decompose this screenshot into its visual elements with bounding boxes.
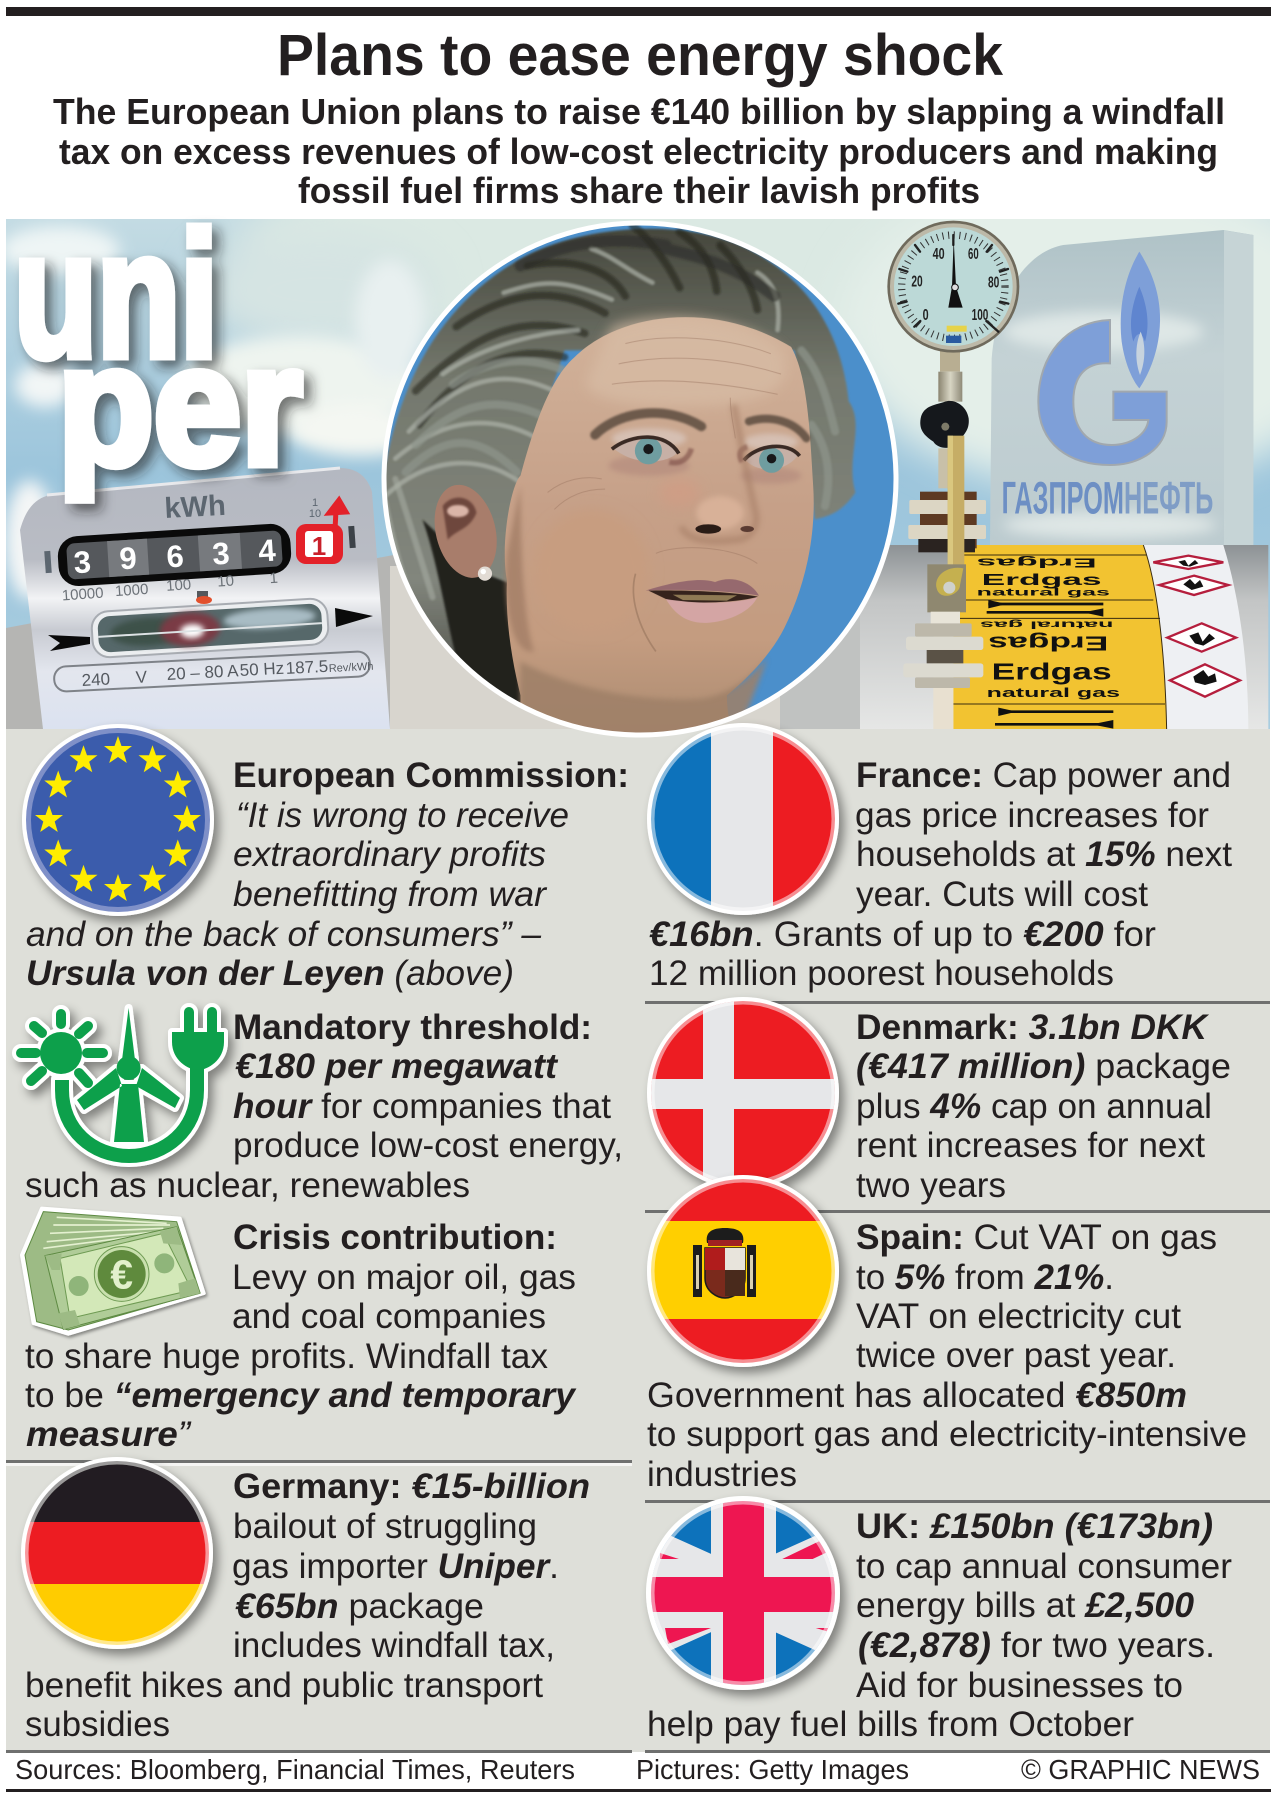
top rule	[6, 7, 1271, 16]
text: Denmark: Denmark: 3.1bn DKK	[856, 1008, 1210, 1047]
text: Crisis contribution: to be “emergency and temporary	[25, 1376, 577, 1415]
photo: electricity meter	[20, 468, 390, 729]
ear	[434, 484, 497, 581]
photo: Gazprom sign, gauge and gas pipe	[860, 221, 1268, 730]
photo: Uniper logo	[14, 195, 302, 501]
horizontal rules	[6, 1001, 1271, 1792]
text: Denmark: two years	[856, 1166, 1006, 1205]
content panel background	[6, 729, 1270, 1752]
photo: electricity meter: 100	[166, 576, 192, 595]
text: France: 12 million poorest households	[649, 954, 1114, 993]
gas pipe with labels: Erdgas	[977, 555, 1097, 570]
text: Mandatory threshold: €180 per megawatt	[235, 1047, 558, 1086]
text: Mandatory threshold: Mandatory threshold:	[233, 1008, 592, 1047]
text: France: year. Cuts will cost	[856, 875, 1148, 914]
icon: Spanish flag	[645, 1175, 845, 1369]
text: Germany: benefit hikes and public transport	[25, 1666, 543, 1705]
text: Spain	[647, 1218, 1247, 1494]
subtitle	[53, 91, 1225, 211]
text: Germany	[25, 1467, 590, 1744]
icon: EU flag	[22, 724, 214, 916]
text: France: €16bn. Grants of up to €200 for	[649, 915, 1156, 954]
text: Spain: to 5% from 21%.	[856, 1258, 1114, 1297]
text: Denmark: (€417 million) package	[856, 1047, 1231, 1086]
gas pipe with labels: natural gas	[979, 618, 1113, 629]
photo: electricity meter: 4	[257, 533, 277, 569]
photo montage background	[6, 219, 1270, 729]
text: Crisis contribution: and coal companies	[232, 1297, 546, 1336]
text: Denmark: plus 4% cap on annual	[856, 1087, 1212, 1126]
photo: electricity meter: kWh	[164, 490, 227, 525]
text: Crisis contribution: Crisis contribution:	[233, 1218, 557, 1257]
text: UK: energy bills at £2,500	[856, 1586, 1195, 1625]
eyes and brows	[595, 413, 806, 484]
footer credits: Pictures: Getty Images	[636, 1754, 909, 1785]
photo: electricity meter: 9	[118, 540, 138, 576]
text: European Commission: “It is wrong to receive	[236, 796, 569, 835]
photo: electricity meter: 3	[211, 536, 231, 572]
icon: euro banknotes: €	[110, 1251, 133, 1297]
text: Mandatory threshold	[25, 1008, 623, 1205]
gas pipe with labels	[860, 545, 1268, 730]
text: Crisis contribution: measure”	[26, 1415, 191, 1454]
photo: electricity meter: 10000	[61, 585, 104, 604]
photo: electricity meter: 3	[73, 544, 92, 580]
pressure gauge and valve: 40	[933, 246, 945, 263]
photo: electricity meter: 50 Hz	[239, 659, 285, 680]
icon: euro banknotes	[22, 1208, 204, 1334]
gas pipe with labels: Erdgas	[992, 658, 1112, 684]
photo: Uniper logo: uni	[14, 195, 218, 394]
photo: electricity meter: 1	[312, 497, 318, 509]
text: Germany: €65bn package	[235, 1587, 484, 1626]
text: European Commission: European Commission:	[233, 756, 629, 795]
footer credits: © GRAPHIC NEWS	[1021, 1754, 1260, 1785]
text: Spain: Government has allocated €850m	[647, 1376, 1187, 1415]
pressure gauge and valve: 0	[923, 307, 929, 324]
photo: Ursula von der Leyen portrait	[375, 215, 906, 746]
text: France	[649, 756, 1232, 993]
text: Crisis contribution: to share huge profits. Windfall tax	[25, 1337, 548, 1376]
text: Germany: includes windfall tax,	[233, 1626, 555, 1665]
text: Mandatory threshold: such as nuclear, renewables	[25, 1166, 470, 1205]
text: Spain: Spain: Cut VAT on gas	[856, 1218, 1217, 1257]
text: France: France: Cap power and	[856, 756, 1231, 795]
photo: electricity meter: 240	[81, 670, 111, 690]
mouth	[633, 574, 759, 651]
text: Crisis contribution	[25, 1218, 577, 1454]
text: Mandatory threshold: hour for companies that	[233, 1087, 611, 1126]
text: Spain: twice over past year.	[856, 1336, 1176, 1375]
photo: electricity meter: 1000	[114, 581, 149, 600]
text: UK: help pay fuel bills from October	[647, 1705, 1134, 1744]
icon: German flag	[20, 1455, 220, 1654]
footer credits: Sources: Bloomberg, Financial Times, Reuters	[15, 1754, 575, 1785]
text: Germany: gas importer Uniper.	[232, 1547, 559, 1586]
photo: electricity meter: 10	[217, 572, 235, 591]
icon: Danish flag	[645, 995, 845, 1195]
text: European Commission: benefitting from war	[233, 875, 547, 914]
pressure gauge and valve: 100	[972, 307, 988, 324]
title: Plans to ease energy shock	[277, 23, 1004, 88]
photo: electricity meter: 10	[309, 508, 321, 520]
gas pipe with labels: Erdgas	[988, 632, 1108, 654]
icon: UK flag	[644, 1496, 852, 1702]
photo: electricity meter: Rev/kWh	[329, 661, 374, 675]
pressure gauge and valve: 20	[911, 274, 923, 291]
gas pipe with labels: natural gas	[977, 588, 1111, 599]
photo: electricity meter: 187.5	[285, 657, 329, 678]
text: Germany: subsidies	[25, 1705, 170, 1744]
text: Spain: to support gas and electricity-intensive	[647, 1415, 1247, 1454]
Gazprom sign: ГАЗПРОМНЕФТЬ	[1002, 472, 1213, 523]
icon: French flag	[645, 720, 843, 920]
photo: electricity meter: 20 – 80 A	[166, 661, 240, 684]
gas pipe with labels: natural gas	[987, 685, 1120, 700]
pressure gauge and valve: 80	[988, 274, 999, 291]
face	[425, 317, 814, 746]
text: France: gas price increases for	[855, 796, 1209, 835]
text: Crisis contribution: Levy on major oil, gas	[232, 1258, 576, 1297]
text: European Commission: extraordinary profits	[233, 835, 546, 874]
pressure gauge and valve	[887, 221, 1019, 730]
subtitle: The European Union plans to raise €140 billion by slapping a windfall	[53, 91, 1225, 132]
text: Spain: VAT on electricity cut	[856, 1297, 1181, 1336]
text: UK: (€2,878) for two years.	[858, 1626, 1215, 1665]
photo: electricity meter: V	[135, 667, 148, 687]
text: UK: to cap annual consumer	[856, 1547, 1232, 1586]
photo: electricity meter: 6	[165, 538, 185, 574]
text: Spain: industries	[647, 1455, 797, 1494]
nose	[681, 404, 756, 541]
Gazprom sign	[990, 230, 1253, 545]
photo: Uniper logo: per	[58, 311, 302, 501]
gas pipe with labels: Erdgas	[982, 572, 1102, 589]
text: European Commission: and on the back of consumers” –	[26, 915, 542, 954]
text: UK: Aid for businesses to	[856, 1666, 1183, 1705]
text: European Commission: Ursula von der Leyen (above)	[26, 954, 514, 993]
text: European Commission	[26, 756, 629, 993]
footer credits	[15, 1754, 1260, 1785]
photo: electricity meter: 1	[312, 531, 326, 561]
pressure gauge and valve: 60	[968, 246, 979, 263]
text: Germany: Germany: €15-billion	[233, 1467, 590, 1506]
wrinkles	[548, 338, 781, 563]
text: Germany: bailout of struggling	[233, 1507, 537, 1546]
photo: electricity meter: 1	[269, 570, 278, 587]
text: Denmark: rent increases for next	[856, 1126, 1205, 1165]
icon: renewable energy	[21, 1008, 224, 1156]
text: UK	[647, 1507, 1232, 1744]
text: France: households at 15% next	[856, 835, 1232, 874]
coat of arms	[693, 1228, 756, 1298]
subtitle: fossil fuel firms share their lavish profits	[298, 170, 980, 211]
hair	[375, 225, 856, 729]
text: Mandatory threshold: produce low-cost energy,	[233, 1126, 623, 1165]
subtitle: tax on excess revenues of low-cost electricity producers and making	[59, 131, 1218, 172]
text: Denmark	[856, 1008, 1231, 1205]
text: UK: UK: £150bn (€173bn)	[856, 1507, 1213, 1546]
